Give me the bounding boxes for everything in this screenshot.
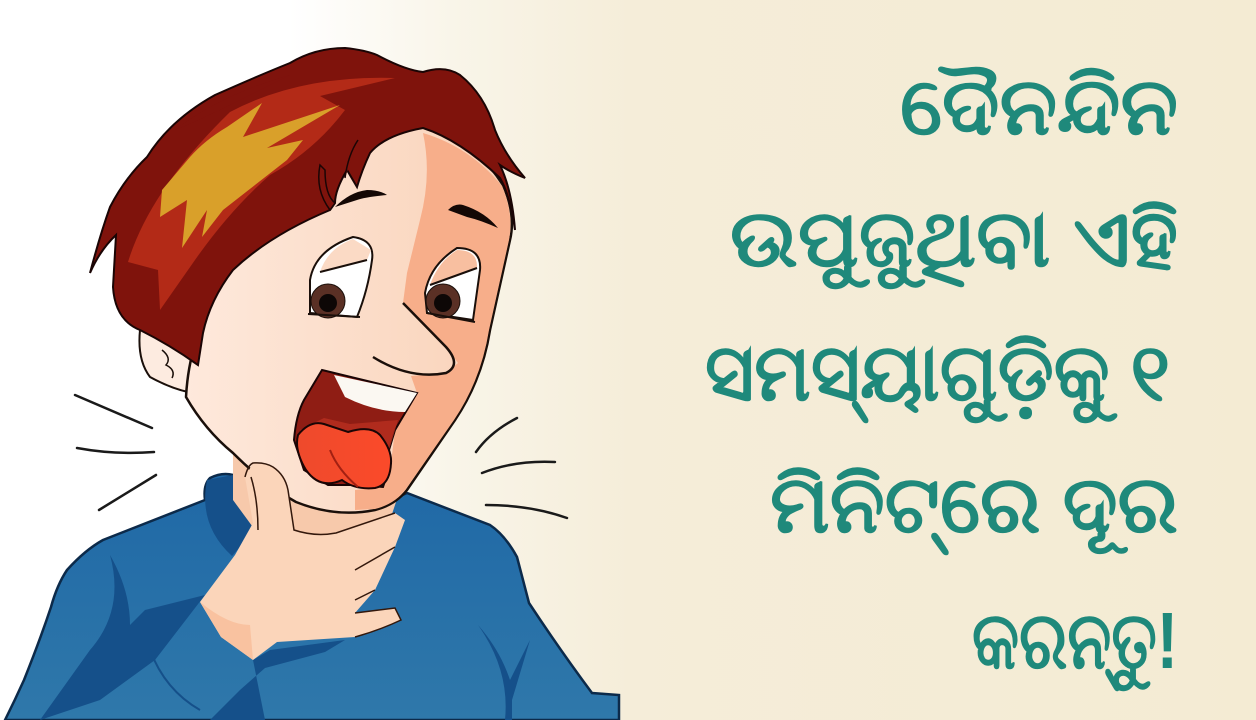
teeth <box>334 375 417 412</box>
motion lines right <box>476 418 567 518</box>
line 4: ମିନିଟ୍‌ରେ ଦୂର <box>770 460 1178 556</box>
motion lines left <box>75 395 156 510</box>
hair <box>90 48 525 365</box>
face shading <box>355 133 510 510</box>
line 5: କରନ୍ତୁ! <box>972 596 1178 692</box>
eyebrows <box>335 190 498 228</box>
face <box>186 115 512 513</box>
illustration: choking man <box>5 48 619 720</box>
nose <box>373 303 454 375</box>
tongue <box>297 423 391 488</box>
eye: right <box>425 248 480 322</box>
hand <box>200 463 405 660</box>
hair highlight <box>160 103 340 248</box>
ear <box>139 324 200 392</box>
neck <box>233 445 400 560</box>
eye: left <box>308 237 372 318</box>
line 1: ଦୈନନ୍ଦିନ <box>900 62 1178 151</box>
line 2: ଉପୁଜୁଥିବା ଏହି <box>730 194 1178 290</box>
line 3: ସମସ୍ୟାଗୁଡ଼ିକୁ ୧ <box>705 328 1170 424</box>
shirt <box>5 474 619 720</box>
heading text <box>705 62 1178 692</box>
mouth <box>294 370 417 488</box>
